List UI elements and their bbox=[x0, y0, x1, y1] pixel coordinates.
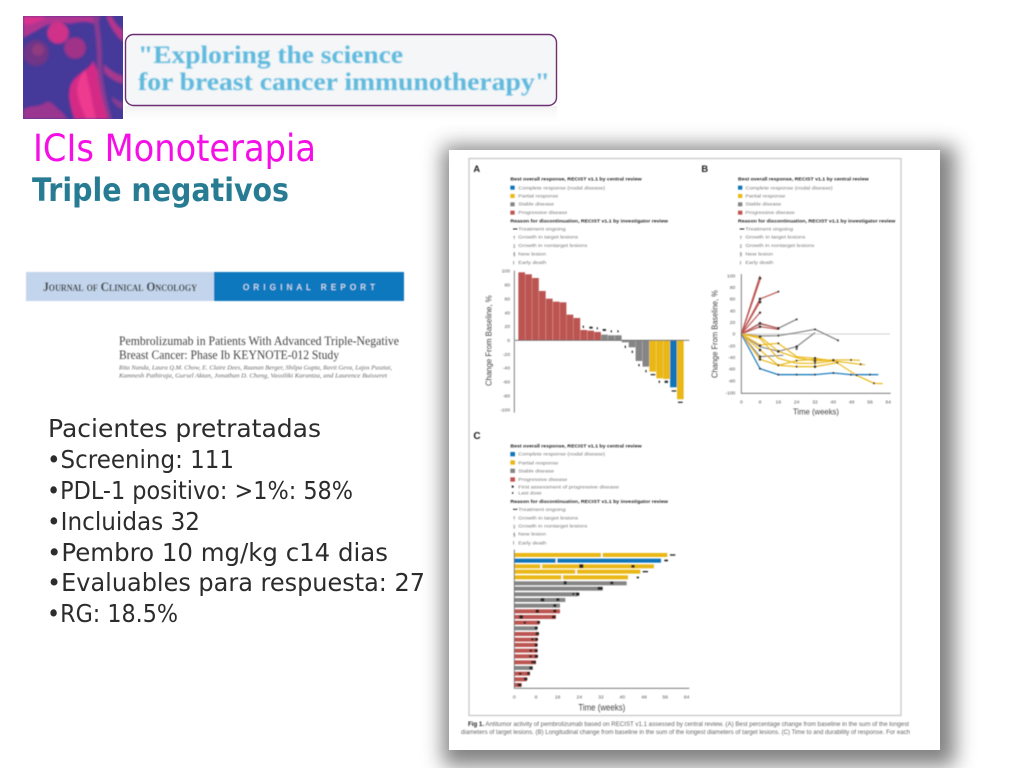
panel A legend: Best overall response, RECIST v1.1 by central review bbox=[510, 177, 642, 183]
panel A: waterfall chart bbox=[473, 164, 689, 413]
panel B legend: § bbox=[740, 253, 743, 258]
journal header banner bbox=[26, 272, 404, 301]
panel C axes: 56 bbox=[663, 694, 668, 700]
article title and authors: Breast Cancer: Phase Ib KEYNOTE-012 Study bbox=[119, 348, 340, 362]
figure caption: Fig 1. Antitumor activity of pembrolizumab based on RECIST v1.1 assessed by central review. (A) Best percentage change from baseline in the sum of the longest bbox=[468, 721, 909, 728]
panel C bars bbox=[514, 553, 667, 687]
panel C legend: First assessment of progressive disease bbox=[518, 484, 619, 490]
panel B legend: ‡ bbox=[740, 244, 743, 249]
panel B legend: Progressive disease bbox=[745, 210, 795, 216]
panel C axes: 40 bbox=[620, 694, 625, 700]
panel A legend: Treatment ongoing bbox=[518, 227, 566, 233]
panel A legend: † bbox=[513, 236, 516, 241]
panel A axes: -100 bbox=[500, 407, 510, 413]
panel C legend: † bbox=[513, 517, 516, 522]
panel A legend: Growth in nontarget lesions bbox=[518, 243, 588, 249]
panel A axes: 80 bbox=[504, 283, 510, 289]
panel B axes: 100 bbox=[727, 273, 736, 279]
panel A bars bbox=[518, 272, 684, 399]
panel A legend bbox=[510, 177, 668, 266]
panel C legend: Growth in nontarget lesions bbox=[518, 524, 588, 530]
panel C legend: Complete response (nodal disease) bbox=[518, 452, 605, 458]
panel A axes: -80 bbox=[503, 393, 510, 399]
panel A axes: 60 bbox=[504, 296, 510, 302]
panel B: spider plot: B bbox=[701, 164, 708, 174]
panel B axes: 64 bbox=[886, 399, 891, 405]
panel B axes: 24 bbox=[794, 399, 800, 405]
figure caption bbox=[461, 721, 910, 736]
patient bullet list: •Evaluables para respuesta: 27 bbox=[47, 568, 425, 597]
panel B axes: -100 bbox=[725, 390, 736, 396]
panel C legend: Partial response bbox=[518, 460, 559, 466]
panel B axes: -60 bbox=[728, 367, 736, 373]
panel B axes: 80 bbox=[730, 285, 736, 291]
panel A response markers bbox=[583, 326, 683, 403]
panel C legend: Best overall response, RECIST v1.1 by central review bbox=[510, 443, 642, 449]
panel B axes: -40 bbox=[728, 355, 736, 361]
panel B legend: New lesion bbox=[745, 251, 773, 257]
panel C axes: 0 bbox=[513, 694, 516, 700]
subtitle: Triple negativos bbox=[32, 171, 289, 209]
panel C axes: 16 bbox=[555, 694, 561, 700]
panel B axes: 40 bbox=[831, 399, 836, 405]
patient bullet list: •Pembro 10 mg/kg c14 dias bbox=[47, 538, 388, 567]
panel A axes: 20 bbox=[504, 324, 510, 330]
patient bullet list: •Incluidas 32 bbox=[47, 507, 200, 536]
panel A legend: Progressive disease bbox=[518, 210, 568, 216]
banner: exploring the science: "Exploring the science bbox=[138, 42, 403, 69]
panel B axes: -80 bbox=[728, 378, 736, 384]
panel C legend: Early death bbox=[518, 540, 547, 546]
panel C axes: 48 bbox=[641, 694, 647, 700]
patient bullet list: •Screening: 111 bbox=[47, 445, 234, 474]
panel A legend: Partial response bbox=[518, 194, 559, 200]
panel A legend: Early death bbox=[518, 260, 547, 266]
figure paper bbox=[449, 150, 940, 750]
panel A axes: 100 bbox=[502, 269, 510, 275]
panel A axes bbox=[484, 269, 689, 413]
panel B lines bbox=[741, 276, 890, 384]
panel B axes: Time (weeks) bbox=[793, 408, 839, 417]
panel A legend: New lesion bbox=[518, 251, 546, 257]
panel B axes: 0 bbox=[740, 399, 743, 405]
panel A legend: ‡ bbox=[513, 244, 516, 249]
panel C legend bbox=[510, 443, 668, 547]
panel C legend: ‖ bbox=[513, 542, 515, 547]
panel C legend: Progressive disease bbox=[518, 477, 568, 483]
panel C axes bbox=[513, 550, 690, 713]
panel B legend bbox=[738, 177, 895, 266]
panel B axes: 60 bbox=[730, 297, 736, 303]
panel B legend: ‖ bbox=[740, 261, 742, 266]
panel C legend: Last dose bbox=[518, 491, 542, 497]
panel C axes: Time (weeks) bbox=[578, 703, 625, 713]
panel C axes: 24 bbox=[577, 694, 582, 700]
panel C legend: Treatment ongoing bbox=[518, 507, 566, 513]
panel C legend: New lesion bbox=[518, 532, 546, 538]
panel B axes: 48 bbox=[849, 399, 855, 405]
title: ICIs Monoterapia bbox=[33, 127, 316, 170]
article title and authors: Kamnesh Pathiraja, Gursel Aktan, Jonathan D. Cheng, Vassiliki Karantza, and Laurence Buisseret bbox=[118, 372, 387, 380]
panel B axes: 16 bbox=[776, 399, 781, 405]
panel A axes: Change From Baseline, % bbox=[484, 295, 493, 386]
panel B data points bbox=[759, 277, 875, 384]
panel C legend: Growth in target lesions bbox=[518, 515, 579, 521]
journal header banner: ORIGINAL REPORT bbox=[243, 283, 375, 292]
panel B legend: Complete response (nodal disease) bbox=[745, 185, 833, 191]
banner: exploring the science: for breast cancer immunotherapy" bbox=[138, 69, 550, 96]
panel B legend: Best overall response, RECIST v1.1 by central review bbox=[738, 177, 869, 183]
panel A legend: Complete response (nodal disease) bbox=[518, 185, 605, 191]
panel C legend: Reason for discontinuation, RECIST v1.1 by investigator review bbox=[510, 499, 668, 505]
banner: exploring the science bbox=[126, 34, 556, 106]
panel C legend: Stable disease bbox=[518, 469, 554, 475]
panel B axes: 56 bbox=[867, 399, 873, 405]
patient bullet list: Pacientes pretratadas bbox=[48, 414, 321, 443]
panel C legend: ‡ bbox=[513, 525, 516, 530]
panel A axes: 0 bbox=[507, 338, 510, 344]
patient bullet list bbox=[47, 414, 425, 628]
article title and authors bbox=[118, 334, 399, 380]
figure caption: diameters of target lesions. (B) Longitudinal change from baseline in the sum of the longest diameters of target lesions. (C) Time to and durability of response. For each bbox=[461, 729, 910, 736]
panel B: spider plot bbox=[701, 164, 895, 417]
panel A legend: § bbox=[513, 253, 516, 258]
panel B legend: Reason for discontinuation, RECIST v1.1 by investigator review bbox=[738, 218, 895, 224]
panel A axes: -60 bbox=[503, 380, 510, 386]
panel C: swimmer plot bbox=[473, 431, 690, 713]
panel C axes: 8 bbox=[535, 694, 538, 700]
panel B axes bbox=[711, 273, 891, 417]
panel B legend: Growth in target lesions bbox=[745, 235, 806, 241]
article title and authors: Rita Nanda, Laura Q.M. Chow, E. Claire Dees, Raanan Berger, Shilpa Gupta, Ravit Geva, Lajos Pusztai, bbox=[118, 364, 392, 372]
panel B axes: Change From Baseline, % bbox=[711, 290, 720, 378]
panel B axes: 8 bbox=[759, 399, 762, 405]
panel B legend: Treatment ongoing bbox=[745, 227, 793, 233]
panel A legend: ‖ bbox=[513, 261, 515, 266]
panel B axes: 32 bbox=[812, 399, 818, 405]
panel C axes: 64 bbox=[684, 694, 690, 700]
panel A axes: -40 bbox=[503, 366, 510, 372]
panel C response onset ticks bbox=[540, 553, 603, 579]
logo image: pink and purple cells bbox=[23, 16, 123, 119]
panel B axes: 20 bbox=[730, 320, 736, 326]
panel B axes: 40 bbox=[730, 308, 736, 314]
panel B axes: -20 bbox=[728, 343, 736, 349]
paper shadow bbox=[443, 146, 955, 766]
panel B legend: Partial response bbox=[745, 194, 786, 200]
panel B legend: Stable disease bbox=[745, 202, 782, 208]
panel A legend: Growth in target lesions bbox=[518, 235, 579, 241]
panel C legend: § bbox=[513, 533, 516, 538]
panel C: swimmer plot: C bbox=[473, 431, 481, 442]
panel A axes: -20 bbox=[503, 352, 510, 358]
panel A axes: 40 bbox=[504, 310, 510, 316]
panel C event markers bbox=[518, 554, 675, 686]
journal header banner: Journal of Clinical Oncology bbox=[43, 279, 197, 294]
article title and authors: Pembrolizumab in Patients With Advanced Triple-Negative bbox=[119, 334, 399, 348]
panel B legend: Early death bbox=[745, 260, 774, 266]
panel B legend: Growth in nontarget lesions bbox=[745, 243, 815, 249]
panel B axes: 0 bbox=[733, 332, 736, 338]
patient bullet list: •PDL-1 positivo: >1%: 58% bbox=[47, 476, 353, 505]
banner: quote reflection bbox=[125, 106, 557, 124]
panel A legend: Stable disease bbox=[518, 202, 554, 208]
panel A: waterfall chart: A bbox=[473, 164, 480, 174]
patient bullet list: •RG: 18.5% bbox=[47, 599, 178, 628]
panel C axes: 32 bbox=[598, 694, 604, 700]
panel B legend: † bbox=[740, 236, 743, 241]
panel A legend: Reason for discontinuation, RECIST v1.1 by investigator review bbox=[510, 218, 668, 224]
